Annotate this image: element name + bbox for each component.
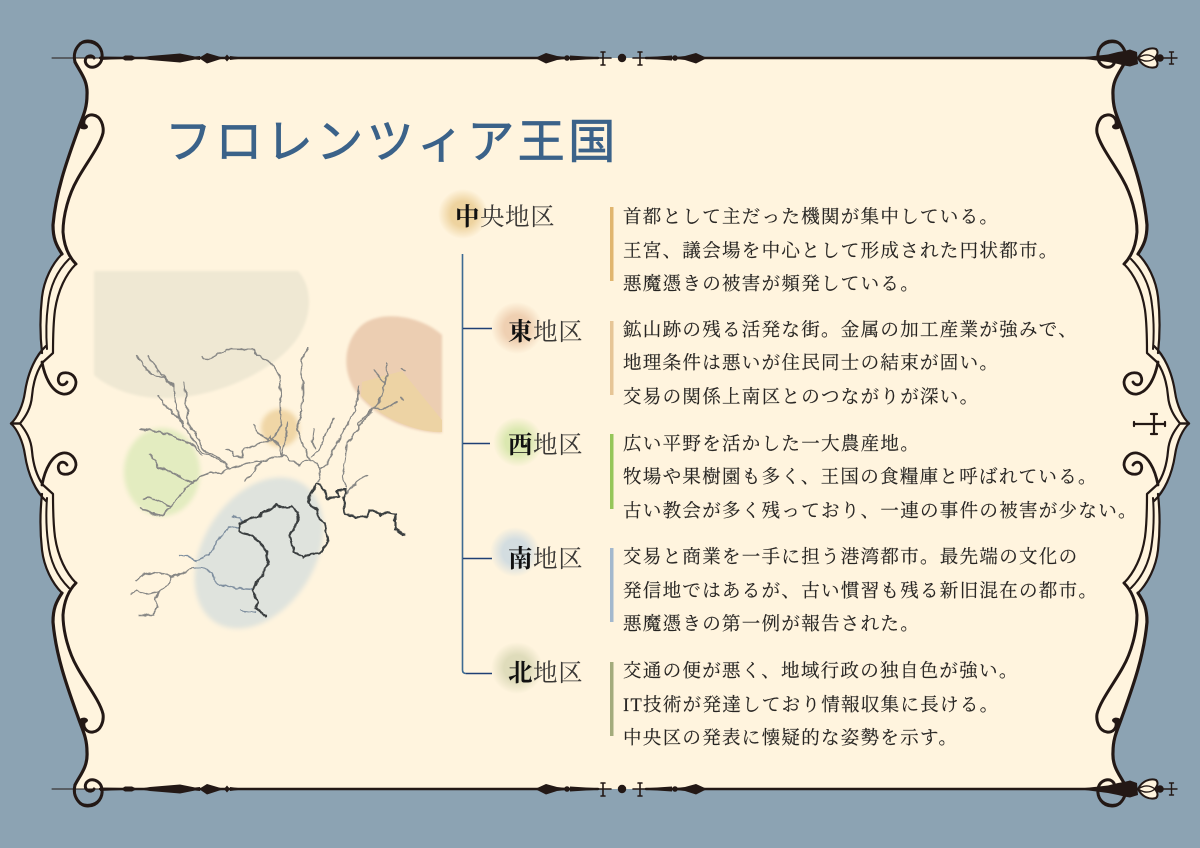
icon: side cross [1134,414,1165,434]
description: 首都として主だった機関が集中している。 [623,207,999,228]
region: east [346,316,442,433]
description: 広い平野を活かした一大農産地。 [623,434,920,455]
accent bar [610,548,614,622]
description: 地理条件は悪いが住民同士の結束が固い。 [623,352,999,374]
description: 中央区の発表に懐疑的な姿勢を示す。 [623,727,958,749]
glow [438,189,488,239]
rivers [132,348,405,616]
glow [491,642,543,694]
region: central [261,409,299,447]
map [94,271,442,652]
accent bar [610,321,614,395]
region: south [168,454,350,652]
glow [490,527,540,577]
description [623,320,1078,408]
region: west [124,428,200,516]
accent bar [610,662,614,736]
accent bar [610,207,614,281]
accent bar [610,434,614,509]
description: 交易と商業を一手に担う港湾都市。最先端の文化の [623,547,1078,568]
district: west [493,417,1138,522]
description [623,434,1138,522]
description: 王宮、議会場を中心として形成された円状都市。 [623,241,1059,262]
glow [493,417,543,467]
label: 南地区 [508,545,583,573]
title: フロレンツィア王国 [165,115,619,168]
label: 東地区 [508,318,583,346]
district tree connector [462,254,492,674]
region: east overlap [361,371,442,432]
description: 悪魔憑きの被害が頻発している。 [623,274,920,295]
description: 悪魔憑きの第一例が報告された。 [623,613,920,635]
description: 発信地ではあるが、古い慣習も残る新旧混在の都市。 [623,581,1098,602]
description: 交易の関係上南区とのつながりが深い。 [623,386,979,408]
description: 古い教会が多く残っており、一連の事件の被害が少ない。 [623,501,1138,522]
label: 中央地区 [455,203,555,231]
region: north [94,271,309,398]
description [623,661,1019,749]
district: south [490,527,1098,635]
label: 北地区 [508,659,583,687]
description: 交通の便が悪く、地域行政の独自色が強い。 [623,661,1019,682]
district: north [491,642,1019,749]
description: 牧場や果樹園も多く、王国の食糧庫と呼ばれている。 [623,467,1098,488]
description: IT技術が発達しており情報収集に長ける。 [623,694,999,716]
description [623,207,1059,295]
district: central [438,189,1059,295]
description [623,547,1098,635]
glow [491,302,543,354]
description: 鉱山跡の残る活発な街。金属の加工産業が強みで、 [623,320,1078,341]
label: 西地区 [508,431,583,459]
district: east [491,302,1078,408]
